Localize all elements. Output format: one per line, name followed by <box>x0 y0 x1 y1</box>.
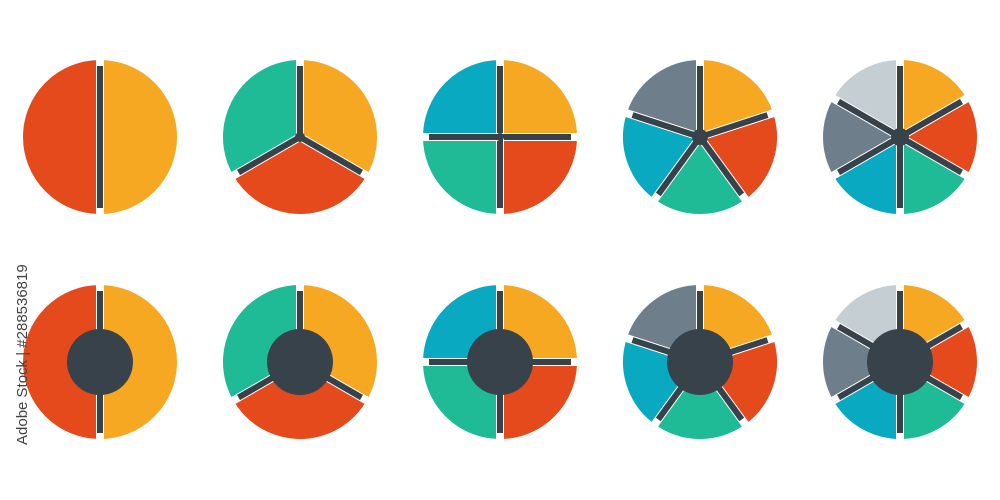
chart: 2 segments <box>62 52 138 222</box>
donut: 4 segments <box>415 277 585 447</box>
row 2 donut charts <box>62 277 974 447</box>
donut: 2 segments <box>62 277 138 447</box>
donut: 3 segments <box>226 277 374 415</box>
donut: 6 segments <box>826 277 974 447</box>
row 1 charts <box>62 52 974 222</box>
donut: 5 segments <box>619 277 781 431</box>
chart: 6 segments <box>826 52 974 222</box>
chart: 5 segments <box>619 52 781 206</box>
chart: 4 segments <box>415 52 585 222</box>
chart: 3 segments <box>226 52 374 190</box>
watermark text: Adobe Stock | #288536819 <box>14 264 31 445</box>
